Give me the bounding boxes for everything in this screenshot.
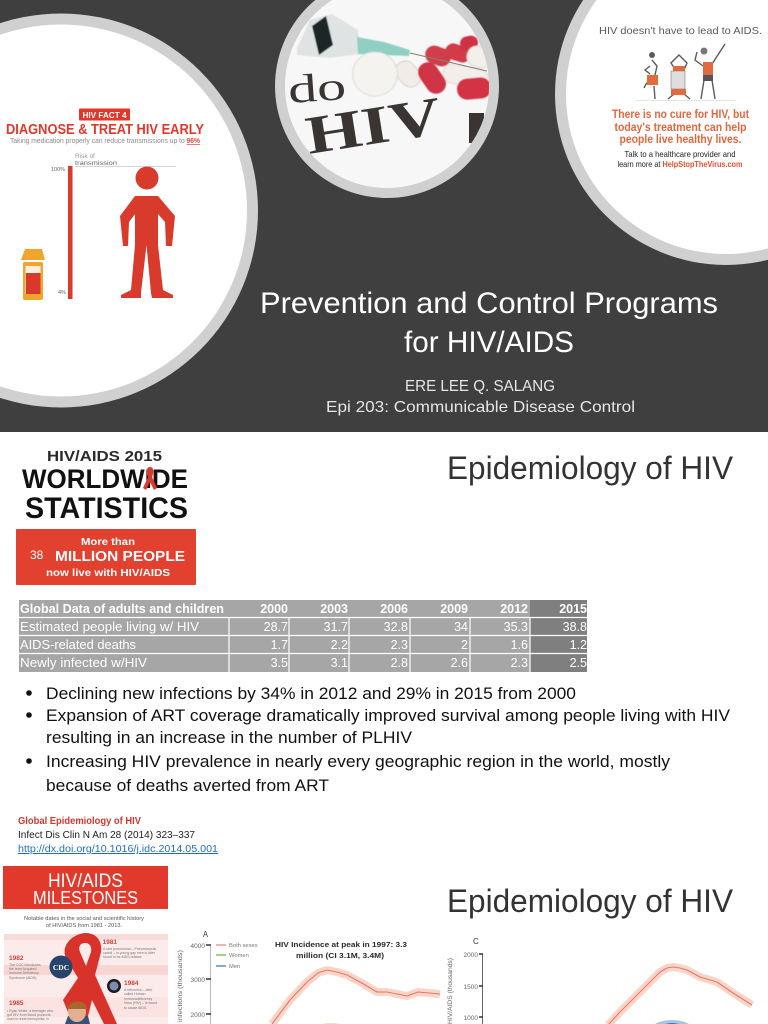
text: key findings bullets: Increasing HIV prevalence in nearly every geographic region in the world, mostly — [46, 752, 671, 771]
panel: worldwide statistics graphic: MILLION PEOPLE — [55, 549, 185, 565]
icon: three exercising figures — [636, 44, 736, 100]
milestone 1982 with CDC badge: The CDC introduces — [9, 963, 41, 967]
panel: HIV/AIDS milestones graphic: of HIV/AIDS from 1981 - 2013. — [46, 923, 122, 929]
panel: worldwide statistics graphic: now live with HIV/AIDS — [46, 568, 170, 579]
text: no cure message: people live healthy lives. — [620, 134, 742, 146]
badge: HIV fact 4 — [79, 108, 130, 120]
text: no cure message — [612, 109, 749, 146]
line: women incidence — [313, 1023, 349, 1024]
table: global data of adults and children: 2.3 — [511, 656, 528, 670]
chart: people living with HIV/AIDS, panel C — [447, 937, 752, 1024]
table: global data of adults and children: 1.6 — [511, 638, 528, 652]
text: author and course: Epi 203: Communicable Disease Control — [326, 399, 635, 416]
milestone 1984 with virus icon: Immunodeficiency — [124, 997, 152, 1001]
chart: people living with HIV/AIDS, panel C: HIV/AIDS (thousands) — [447, 958, 454, 1024]
chart: risk of transmission bar: 4% — [58, 290, 66, 296]
icon: red person — [120, 166, 175, 298]
milestone 1984 with virus icon — [107, 979, 157, 1010]
table: global data of adults and children: 2015 — [559, 602, 587, 616]
table: global data of adults and children: Newly infected w/HIV — [20, 656, 148, 670]
table: global data of adults and children: AIDS-related deaths — [20, 638, 136, 652]
heading: epidemiology of HIV: Epidemiology of HIV — [447, 450, 734, 486]
panel: worldwide statistics graphic: WORLDWIDE — [22, 464, 188, 494]
table: global data of adults and children: 2006 — [380, 602, 408, 616]
text: talk to a healthcare provider: Talk to a healthcare provider and — [624, 149, 736, 159]
milestone 1982 with CDC badge: CDC — [53, 963, 69, 972]
milestone 1984 with virus icon: 1984 — [124, 980, 139, 987]
text: key findings bullets: Declining new infections by 34% in 2012 and 29% in 2015 from 2000 — [46, 684, 576, 703]
milestone 1981: found to be AIDS-related. — [103, 955, 142, 959]
table: global data of adults and children — [19, 600, 587, 672]
chart: HIV incidence, panel A — [177, 930, 440, 1024]
table: global data of adults and children: 2 — [461, 638, 468, 652]
chart: risk of transmission bar: Risk of — [75, 153, 95, 160]
table: global data of adults and children: 2012 — [500, 602, 528, 616]
text: HIV doesn't have to lead to AIDS: HIV doesn't have to lead to AIDS. — [599, 25, 762, 37]
table: global data of adults and children: 1.7 — [271, 638, 288, 652]
milestone 1982 with CDC badge: Syndrome (AIDS). — [9, 976, 37, 980]
milestone 1984 with virus icon: called Human — [124, 992, 145, 996]
text: key findings bullets: Expansion of ART coverage dramatically improved survival among people living with HIV — [46, 706, 731, 725]
table: global data of adults and children: 2.3 — [391, 638, 408, 652]
milestone 1982 with CDC badge: 1982 — [9, 955, 24, 962]
chart: HIV incidence, panel A: 4000 — [191, 943, 205, 950]
panel: worldwide statistics graphic: HIV/AIDS 2015 — [47, 448, 162, 465]
milestone 1985 with portrait: 1985 — [9, 1000, 24, 1007]
panel: HIV/AIDS milestones graphic: Notable dates in the social and scientific history — [24, 916, 144, 922]
table: global data of adults and children: 3.5 — [271, 656, 288, 670]
chart: HIV incidence, panel A: 3000 — [191, 977, 205, 984]
chart note: incidence at peak — [275, 940, 407, 960]
table: global data of adults and children: 2.8 — [391, 656, 408, 670]
photo: needle — [410, 53, 487, 71]
milestone 1982 with CDC badge — [9, 955, 72, 980]
text: talk to a healthcare provider — [618, 151, 742, 168]
panel: worldwide statistics graphic: STATISTICS — [25, 492, 188, 525]
panel: HIV/AIDS milestones graphic — [3, 866, 168, 1024]
table: global data of adults and children: 34 — [454, 620, 468, 634]
photo text: HIV document: do — [286, 63, 347, 112]
panel: HIV/AIDS milestones graphic: HIV/AIDS — [48, 871, 123, 892]
text: no cure message: There is no cure for HIV, but — [612, 109, 749, 121]
table: global data of adults and children: 3.1 — [331, 656, 348, 670]
text: citation: http://dx.doi.org/10.1016/j.idc.2014.05.001 — [18, 844, 218, 855]
chart: HIV incidence, panel A: 2000 — [191, 1012, 205, 1019]
milestone 1982 with CDC badge: Immune Deficiency — [9, 971, 39, 975]
heading: diagnose and treat: DIAGNOSE & TREAT HIV EARLY — [6, 122, 204, 138]
table: global data of adults and children: 1.2 — [570, 638, 587, 652]
chart: people living with HIV/AIDS, panel C: 1500 — [464, 984, 478, 991]
text: talk to a healthcare provider: learn more at HelpStopTheVirus.com — [618, 159, 743, 169]
milestone 1984 with virus icon: A retrovirus – later — [124, 988, 153, 992]
panel: HIV/AIDS milestones graphic: MILESTONES — [33, 888, 138, 908]
table: global data of adults and children: 2009 — [440, 602, 468, 616]
photo text: HIV document: HIV — [301, 85, 445, 166]
heading: epidemiology of HIV second slide: Epidemiology of HIV — [447, 883, 734, 919]
text: key findings bullets — [26, 684, 731, 795]
chart note: incidence at peak: HIV Incidence at peak in 1997: 3.3 — [275, 940, 407, 949]
table: global data of adults and children: 2000 — [260, 602, 288, 616]
title — [262, 292, 717, 352]
table: global data of adults and children: 2.5 — [570, 656, 587, 670]
photo: syringe — [297, 14, 410, 58]
text: key findings bullets: resulting in an increase in the number of PLHIV — [46, 728, 413, 747]
icon: pill bottle — [21, 249, 45, 300]
panel: epidemiology statistics slide — [16, 448, 734, 855]
icon: red ribbon — [143, 467, 157, 490]
title: Prevention and Control Programs — [260, 287, 718, 320]
milestone 1985 with portrait: • Ryan White, a teenager who — [7, 1009, 53, 1013]
table: global data of adults and children: 2.2 — [331, 638, 348, 652]
legend: Women — [229, 953, 249, 959]
milestone 1985 with portrait: got HIV from blood products — [7, 1013, 51, 1017]
milestone 1985 with portrait — [7, 1000, 90, 1024]
text: medication subtitle: Taking medication properly can reduce transmissions up to 96% — [10, 138, 201, 145]
table: global data of adults and children: 31.7 — [324, 620, 348, 634]
milestone 1984 with virus icon: to cause AIDS. — [124, 1006, 147, 1010]
table: global data of adults and children: Global Data of adults and children — [20, 602, 224, 616]
milestone 1985 with portrait: used to treat hemophilia, is — [7, 1017, 49, 1021]
milestone 1981 — [102, 939, 157, 959]
panel: left circle, diagnose and treat early — [0, 14, 258, 408]
title: for HIV/AIDS — [404, 326, 574, 359]
photo text: HIV document — [290, 74, 484, 154]
legend — [216, 943, 258, 970]
table: global data of adults and children: 32.8 — [384, 620, 408, 634]
legend: Men — [229, 964, 240, 970]
badge: HIV fact 4: HIV FACT 4 — [82, 111, 127, 120]
chart note: incidence at peak: million (CI 3.1M, 3.4M) — [296, 951, 385, 960]
milestone 1981: 1981 — [102, 939, 117, 946]
panel: title slide — [0, 0, 768, 432]
line: both sexes — [608, 967, 752, 1024]
chart: people living with HIV/AIDS, panel C: 1000 — [464, 1015, 478, 1022]
chart: people living with HIV/AIDS, panel C: C — [473, 937, 479, 946]
table: global data of adults and children: 2003 — [320, 602, 348, 616]
chart: HIV incidence, panel A: infections (thousands) — [177, 950, 184, 1022]
photo: red and white capsules — [352, 34, 494, 100]
text: author and course — [326, 378, 635, 416]
panel: epidemiology milestones slide — [3, 866, 752, 1024]
table: global data of adults and children: 35.3 — [504, 620, 528, 634]
text: citation: Infect Dis Clin N Am 28 (2014) 323–337 — [18, 830, 195, 841]
table: global data of adults and children: Estimated people living w/ HIV — [20, 620, 200, 634]
table: global data of adults and children: 38.8 — [563, 620, 587, 634]
line: both sexes incidence — [272, 970, 440, 1024]
milestone 1982 with CDC badge: the term Acquired — [9, 967, 36, 971]
table: global data of adults and children: 28.7 — [264, 620, 288, 634]
panel: right circle, HIV does not have to lead to AIDS — [555, 0, 768, 265]
icon: red ribbon — [63, 933, 117, 1024]
panel: middle circle, HIV pills photo — [275, 0, 499, 198]
table: global data of adults and children: 2.6 — [451, 656, 468, 670]
legend: Both sexes — [229, 943, 258, 949]
text: key findings bullets: because of deaths averted from ART — [46, 776, 329, 795]
milestone 1981: carinii – in young gay men is later — [103, 951, 156, 955]
text: citation: Global Epidemiology of HIV — [18, 816, 141, 827]
chart: risk of transmission bar: transmission — [75, 160, 117, 167]
chart: HIV incidence, panel A: A — [203, 930, 209, 939]
milestone 1984 with virus icon: Virus (HIV) – is found — [124, 1001, 157, 1005]
text: author and course: ERE LEE Q. SALANG — [405, 378, 555, 395]
text: citation — [18, 816, 218, 855]
text: no cure message: today's treatment can help — [614, 122, 746, 134]
chart: risk of transmission bar — [51, 153, 176, 299]
panel: worldwide statistics graphic — [16, 448, 196, 585]
milestone 1981: A rare pneumonia – Pneumocystis — [103, 947, 157, 951]
chart: risk of transmission bar: 100% — [51, 167, 65, 173]
chart: people living with HIV/AIDS, panel C: 2000 — [464, 952, 478, 959]
line: men — [650, 1020, 694, 1024]
panel: worldwide statistics graphic: 38 — [30, 548, 44, 562]
panel: worldwide statistics graphic: More than — [81, 536, 135, 548]
